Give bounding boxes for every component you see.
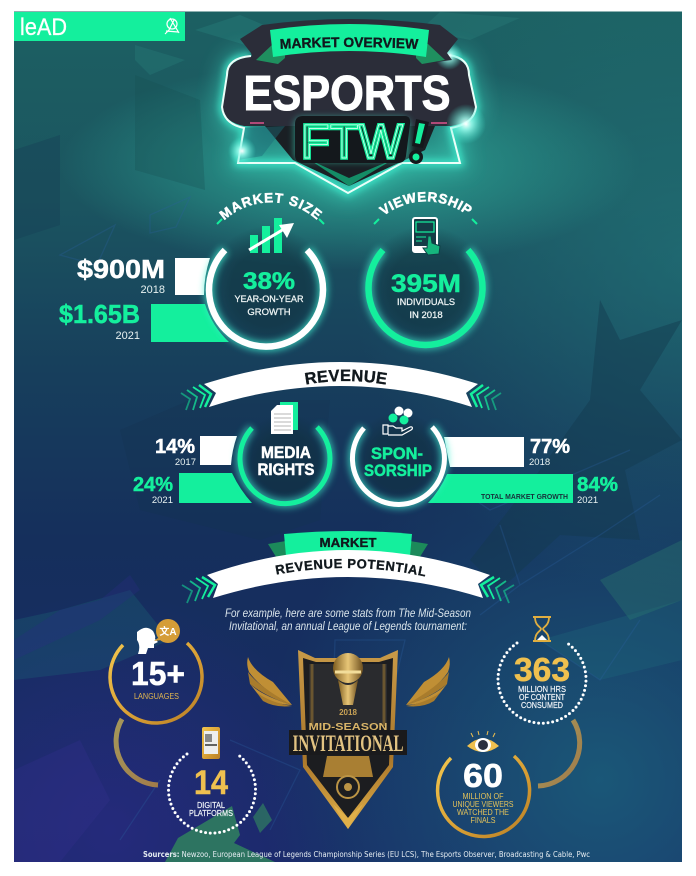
bar: 2018 bbox=[444, 437, 524, 467]
label: LANGUAGES bbox=[134, 691, 179, 701]
dark shield bbox=[265, 126, 435, 186]
name plate bbox=[289, 730, 407, 755]
intro line 2: Invitational, an annual League of Legends tournament: bbox=[229, 621, 467, 633]
tip bbox=[333, 804, 363, 829]
chevrons glow bbox=[185, 386, 492, 404]
dotted ring bbox=[168, 754, 256, 833]
chevrons right bbox=[471, 385, 501, 410]
left wing bbox=[247, 657, 292, 706]
label line 2: PLATFORMS bbox=[189, 809, 233, 818]
subtitle: MARKET OVERVIEW bbox=[280, 37, 419, 49]
neon outline bbox=[222, 55, 476, 193]
chevrons left bbox=[181, 385, 211, 410]
chevrons glow bbox=[185, 578, 500, 596]
panel: market size bbox=[59, 192, 332, 356]
etched panel bbox=[309, 664, 387, 726]
panel: sponsorship bbox=[351, 406, 618, 508]
stat label line 2: GROWTH bbox=[247, 307, 291, 318]
year: 2018 bbox=[339, 708, 357, 717]
pink accents bbox=[250, 122, 447, 124]
green ribbon bbox=[284, 531, 412, 556]
bar caption: TOTAL MARKET GROWTH bbox=[481, 494, 568, 501]
sparks bbox=[228, 42, 486, 165]
ring bbox=[209, 250, 323, 347]
ring bbox=[369, 250, 482, 345]
ring interior shade bbox=[351, 412, 447, 508]
value: 60 bbox=[463, 757, 503, 794]
exclamation mark bbox=[409, 119, 429, 164]
chevrons right bbox=[481, 577, 514, 603]
neon glow bbox=[222, 55, 476, 193]
outer glow bbox=[222, 55, 476, 193]
trophy bbox=[333, 653, 363, 705]
tank base bbox=[323, 756, 373, 777]
heading arc: VIEWERSHIP bbox=[378, 192, 472, 214]
icon: translate bubble: 文A bbox=[159, 625, 177, 638]
icon: eye bbox=[467, 731, 499, 752]
bar: 2021 bbox=[179, 473, 252, 503]
intro text bbox=[225, 608, 471, 633]
banner: revenue bbox=[180, 362, 502, 410]
value: 15+ bbox=[131, 655, 185, 692]
heading: REVENUE bbox=[304, 370, 388, 385]
stat label line 2: IN 2018 bbox=[409, 310, 443, 321]
ring glow bbox=[369, 250, 482, 345]
heading arc: MARKET SIZE bbox=[218, 192, 322, 220]
panel: viewership bbox=[359, 192, 492, 354]
label line 3: CONSUMED bbox=[521, 701, 563, 710]
value: $1.65B: $1.65B bbox=[59, 299, 140, 329]
label: MILLION OF bbox=[462, 792, 504, 801]
ring bbox=[352, 427, 444, 504]
year 2018: 2018 bbox=[529, 457, 550, 468]
icon: documents bbox=[271, 402, 298, 434]
title: FTW highlight: FTW bbox=[301, 116, 404, 169]
bar: 2018 bbox=[175, 258, 210, 295]
FTW glow bbox=[294, 117, 410, 162]
dark plate bbox=[222, 56, 476, 126]
value: $900M: $900M bbox=[77, 254, 165, 284]
year 2017: 2017 bbox=[175, 457, 196, 468]
label: DIGITAL bbox=[197, 801, 225, 810]
heading ticks bbox=[217, 219, 324, 224]
title: esports: ESPORTS bbox=[244, 67, 450, 121]
label line 2: OF CONTENT bbox=[519, 693, 565, 702]
invitational: INVITATIONAL bbox=[292, 731, 404, 756]
year 2018: 2018 bbox=[141, 284, 165, 296]
ribbon wings bbox=[268, 540, 428, 560]
title: FTW backing bbox=[296, 117, 409, 162]
label: media: MEDIA bbox=[261, 444, 311, 462]
stat label: INDIVIDUALS bbox=[397, 297, 455, 308]
stat: 38%: 38% bbox=[243, 268, 295, 295]
icon: ribbon logo bbox=[165, 18, 179, 34]
bar: 2021 bbox=[428, 474, 573, 503]
year 2021: 2021 bbox=[152, 495, 173, 506]
ring glow bbox=[240, 427, 330, 504]
ring interior shade bbox=[364, 226, 488, 350]
label line 3: WATCHED THE bbox=[457, 808, 509, 817]
heading ticks bbox=[374, 219, 477, 224]
value: 14 bbox=[194, 764, 228, 802]
year 2021: 2021 bbox=[577, 495, 598, 506]
gold shield bbox=[298, 650, 398, 829]
icon: speaking head bbox=[137, 628, 158, 654]
ring bbox=[240, 427, 330, 504]
right wing bbox=[406, 657, 450, 706]
white ribbon bbox=[207, 550, 490, 598]
white ribbon bbox=[204, 362, 478, 407]
label: MILLION HRS bbox=[518, 685, 566, 694]
icon: hand with coins bbox=[383, 406, 412, 435]
panel: media rights bbox=[133, 402, 334, 510]
emblem: mid-season invitational bbox=[247, 650, 450, 829]
title: FTW: FTW bbox=[301, 116, 404, 169]
bar: 2017 bbox=[200, 436, 237, 465]
sources: Sourcers: Newzoo, European League of Legends Championship Series (EU LCS), The Esports Observer, Broadcasting & Cable, Pwc bbox=[143, 850, 590, 859]
medallion bbox=[337, 776, 359, 798]
value: 363 bbox=[514, 651, 570, 688]
year 2021: 2021 bbox=[116, 330, 140, 342]
icon: phone bbox=[202, 727, 220, 759]
ring glow bbox=[209, 250, 323, 347]
ring interior shade bbox=[206, 226, 330, 350]
ring glow bbox=[352, 427, 444, 504]
label line 2: UNIQUE VIEWERS bbox=[452, 800, 514, 809]
chevrons left bbox=[182, 577, 215, 603]
ring bbox=[110, 643, 202, 723]
label: sorship: SORSHIP bbox=[364, 462, 432, 480]
bar: 2021 bbox=[151, 304, 229, 342]
stat: languages bbox=[110, 619, 202, 723]
icon: hourglass bbox=[533, 617, 551, 641]
value: 84%: 84% bbox=[577, 474, 618, 496]
ribbon tails bbox=[240, 19, 458, 64]
ring interior shade bbox=[238, 414, 334, 510]
label line 4: FINALS bbox=[470, 816, 496, 825]
icon: tablet bbox=[413, 218, 440, 255]
label: rights: RIGHTS bbox=[258, 461, 314, 479]
connector arc right bbox=[538, 720, 580, 786]
stat: digital platforms bbox=[168, 727, 256, 833]
stat: unique viewers bbox=[438, 731, 530, 836]
banner: market revenue potential bbox=[182, 531, 514, 604]
icon: growth chart bbox=[249, 218, 294, 253]
mid-season: MID-SEASON bbox=[308, 722, 388, 733]
heading: REVENUE POTENTIAL bbox=[275, 558, 426, 577]
connector arc left bbox=[116, 719, 158, 785]
value: 14%: 14% bbox=[155, 436, 195, 458]
stat: hours consumed bbox=[498, 617, 586, 723]
logo wordmark: leAD bbox=[20, 14, 67, 41]
green ribbon bbox=[270, 24, 429, 57]
inner rails bbox=[312, 664, 384, 726]
label: spon-: SPON- bbox=[371, 445, 423, 463]
intro line 1: For example, here are some stats from The Mid-Season bbox=[225, 608, 471, 620]
stat label: YEAR-ON-YEAR bbox=[234, 294, 304, 305]
dark shield bbox=[303, 658, 393, 818]
value: 24%: 24% bbox=[133, 474, 173, 496]
brand bar bbox=[14, 12, 185, 41]
value: 77%: 77% bbox=[530, 436, 570, 458]
dotted ring bbox=[498, 643, 586, 723]
ring bbox=[438, 756, 530, 836]
title badge bbox=[206, 19, 492, 206]
market label: MARKET bbox=[320, 535, 377, 550]
stat: 395M: 395M bbox=[391, 270, 461, 298]
